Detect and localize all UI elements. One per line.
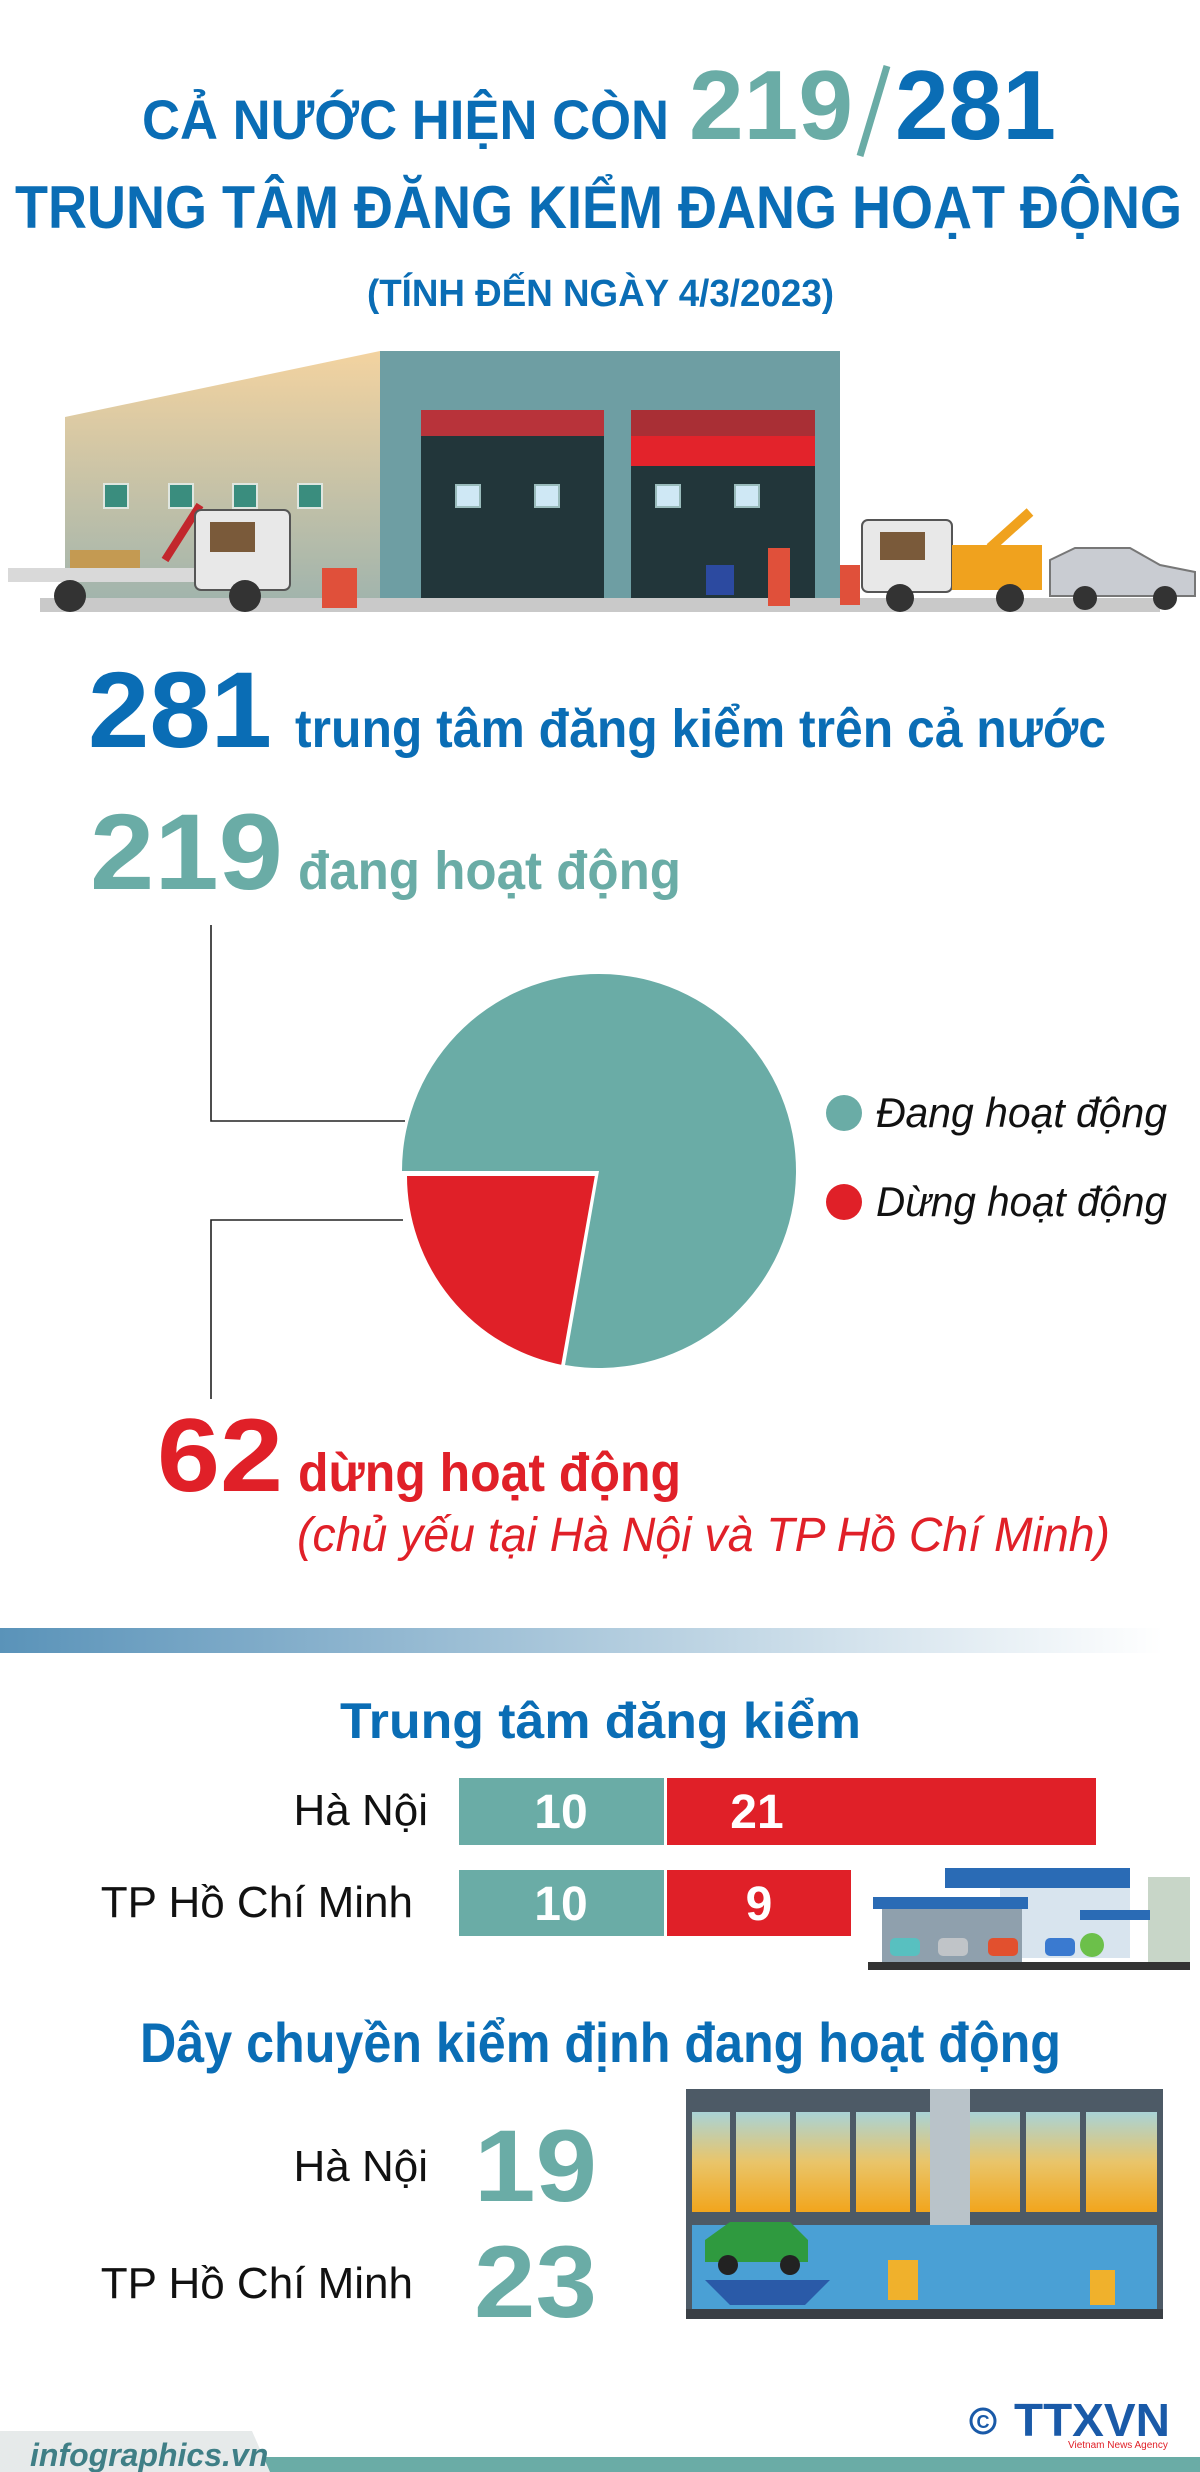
right tow truck and car <box>862 512 1195 612</box>
bar chart: centres by city: 10 <box>534 1878 588 1931</box>
stat: 219 active <box>90 791 681 912</box>
stat: lines TP HCM 23: 23 <box>474 2225 597 2339</box>
stat: 62 stopped: 62 <box>157 1398 283 1514</box>
logo: TTXVN: C <box>976 2412 990 2432</box>
illustration: inspection workshop <box>686 2089 1163 2319</box>
connector lines <box>211 925 405 1399</box>
stat: 219 active: 219 <box>90 791 283 912</box>
title: CẢ NƯỚC HIỆN CÒN <box>142 88 669 151</box>
heading: Dây chuyền kiểm định đang hoạt động: Dây chuyền kiểm định đang hoạt động <box>140 2011 1061 2074</box>
stat: lines TP HCM 23: TP Hồ Chí Minh <box>101 2259 413 2308</box>
heading: Trung tâm đăng kiểm: Trung tâm đăng kiểm <box>340 1693 861 1749</box>
stat: 62 stopped: dừng hoạt động <box>298 1443 681 1503</box>
bar chart: centres by city: TP Hồ Chí Minh <box>101 1878 413 1927</box>
stat: lines Hà Nội 19 <box>294 2109 597 2223</box>
stat: 62 stopped: (chủ yếu tại Hà Nội và TP Hồ Chí Minh) <box>297 1509 1110 1562</box>
logo: TTXVN: TTXVN <box>1014 2394 1170 2446</box>
bar chart: centres by city: 10 <box>534 1786 588 1839</box>
illustration: inspection station <box>868 1868 1190 1970</box>
left truck <box>8 505 290 612</box>
legend: Đang hoạt động <box>876 1089 1167 1136</box>
title: 219 <box>689 50 853 160</box>
stat: lines Hà Nội 19: Hà Nội <box>294 2142 428 2191</box>
stat: 281 total <box>88 649 1106 770</box>
stat: 219 active: đang hoạt động <box>298 841 681 901</box>
bar chart: centres by city: 9 <box>746 1878 772 1931</box>
logo: TTXVN: Vietnam News Agency <box>1068 2440 1168 2451</box>
legend <box>826 1089 1167 1225</box>
divider bar <box>0 1628 1163 1653</box>
bar chart: centres by city <box>101 1778 1096 1936</box>
title <box>15 50 1182 315</box>
legend: Dừng hoạt động <box>876 1178 1167 1225</box>
illustration: inspection building with trucks <box>8 351 1195 612</box>
stat: 62 stopped <box>157 1398 1110 1562</box>
logo: TTXVN <box>971 2394 1170 2451</box>
stat: 281 total: 281 <box>88 649 272 770</box>
title: 281 <box>895 50 1056 160</box>
stat: 281 total: trung tâm đăng kiểm trên cả nước <box>295 699 1106 759</box>
stat: lines TP HCM 23 <box>101 2225 597 2339</box>
title: (TÍNH ĐẾN NGÀY 4/3/2023) <box>367 271 834 315</box>
stat: lines Hà Nội 19: 19 <box>474 2109 597 2223</box>
bar chart: centres by city: Hà Nội <box>294 1786 428 1835</box>
bar chart: centres by city: 21 <box>730 1786 784 1839</box>
footer: infographics.vn <box>30 2437 268 2472</box>
pie chart <box>402 974 796 1368</box>
footer <box>0 2431 1200 2472</box>
